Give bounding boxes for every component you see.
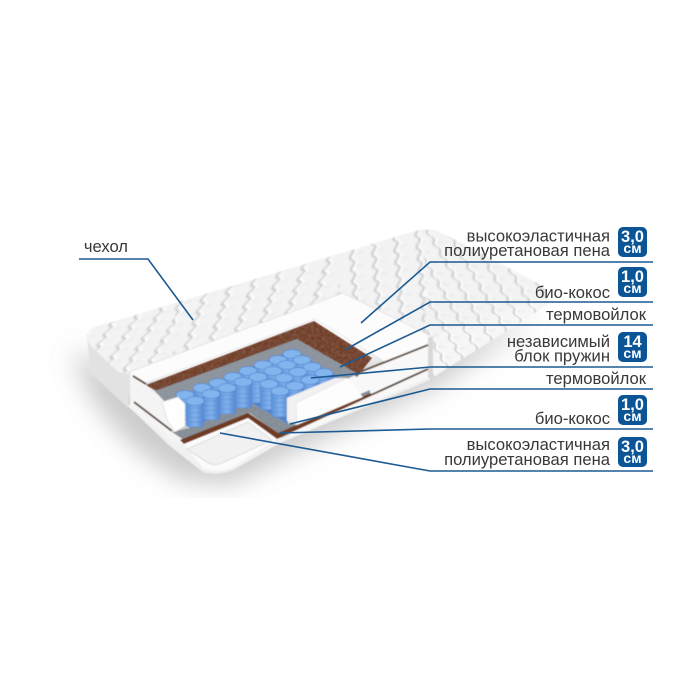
dark seam lines: [133, 345, 428, 431]
pocket springs: [176, 349, 333, 427]
leader line: coconut bottom: [280, 429, 653, 433]
badge: 1,0 см: [618, 267, 647, 297]
badge: 1,0 см: 1,0: [621, 268, 644, 286]
badge: 3,0 см lower: [618, 437, 647, 467]
label: foam bottom: высокоэластичная: [467, 435, 610, 454]
right side quilted face: [432, 296, 549, 378]
leader line: чехол: [79, 259, 193, 320]
badge: 3,0 см lower: 3,0: [621, 438, 644, 456]
badge: 1,0 см lower: [618, 395, 647, 425]
label: coconut bottom: био-кокос: [535, 409, 610, 428]
badge: 1,0 см lower: см: [623, 408, 642, 424]
left white block: [162, 397, 185, 432]
leader line: felt top: [340, 325, 653, 367]
label: coconut top: био-кокос: [535, 283, 610, 302]
badge: 14 см: [618, 332, 647, 362]
badge: 1,0 см: см: [623, 280, 642, 296]
leader line: foam top: [361, 262, 653, 323]
quilted top cover: [86, 229, 546, 374]
bottom foam inner panel: [187, 422, 272, 465]
left side face: [87, 335, 131, 408]
leader line: springs: [311, 367, 653, 378]
top foam layer: [129, 293, 433, 384]
leader line: felt bottom: [290, 389, 653, 424]
mattress illustration: [70, 225, 560, 485]
badge: 14 см: см: [623, 345, 642, 361]
label: foam top: высокоэластичная: [467, 226, 610, 246]
badge: 1,0 см lower: 1,0: [621, 396, 644, 414]
label: springs: независимый: [507, 332, 610, 351]
right white block: [287, 378, 363, 425]
label: felt top: термовойлок: [546, 305, 647, 324]
badge: 3,0 см lower: см: [623, 450, 642, 466]
badge: 3,0 см: [618, 227, 647, 257]
right cut face: [287, 345, 429, 438]
left cut face: [130, 373, 183, 443]
bottom foam layer: [184, 418, 277, 471]
spring floor: [177, 350, 342, 428]
badge: 14 см: 14: [623, 333, 642, 351]
lower felt layer: [172, 390, 370, 440]
shadow: [70, 315, 540, 485]
label: springs: блок пружин: [514, 346, 610, 366]
lower white slab outline: [128, 376, 430, 474]
top coconut layer: [146, 321, 372, 392]
lower coconut layer: [180, 393, 371, 444]
corner post: [428, 337, 433, 378]
leader line: coconut top: [345, 302, 653, 350]
label: felt bottom: термовойлок: [546, 369, 647, 388]
badge: 3,0 см: 3,0: [621, 228, 644, 246]
badge: 3,0 см: см: [623, 240, 642, 256]
label: foam bottom: полиуретановая пена: [444, 450, 611, 469]
top felt layer: [155, 339, 358, 402]
label: foam top: полиуретановая пена: [444, 241, 611, 260]
leader line: foam bottom: [220, 433, 653, 471]
label: чехол: чехол: [84, 237, 128, 256]
